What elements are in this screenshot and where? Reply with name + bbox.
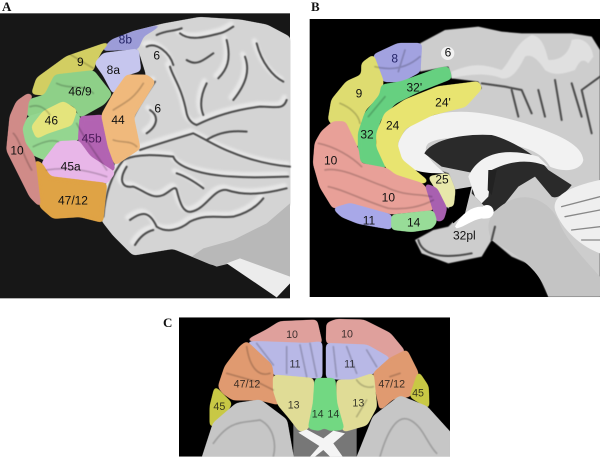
labels C: 10: [286, 329, 298, 341]
sulci: [213, 343, 437, 457]
white optic chiasm: [298, 429, 345, 457]
labels B: 24': [435, 96, 451, 110]
area 8b: [102, 24, 163, 51]
labels A: 6: [154, 101, 161, 115]
labels A: 8a: [107, 63, 120, 77]
area 8a: [95, 49, 141, 94]
labels A: 45a: [61, 159, 81, 173]
labels A: 6: [153, 48, 160, 62]
labels A: 46: [45, 113, 58, 127]
labels C: 13: [352, 398, 364, 410]
labels A: 9: [77, 55, 84, 69]
labels C: 45: [412, 388, 424, 400]
labels C: 47/12: [234, 378, 260, 390]
medial purple area: [425, 183, 447, 222]
labels C: 13: [288, 399, 300, 411]
labels C: 11: [289, 358, 301, 370]
labels B: 14: [407, 215, 421, 229]
area 45b: [78, 115, 115, 173]
labels C: 47/12: [378, 378, 405, 390]
labels B: 6: [445, 46, 452, 60]
area 25: [428, 173, 455, 207]
area 13 left: [273, 375, 315, 432]
labels C: 14: [327, 408, 339, 420]
area 47/12 left: [218, 342, 280, 405]
area 32 and 32': [358, 67, 452, 168]
labels A: 10: [10, 143, 24, 157]
labels B: 8: [391, 52, 398, 66]
labels B: 32pl: [453, 228, 476, 242]
right grey lobe: [356, 396, 450, 457]
brain B: grey cortex and brainstem: [397, 27, 600, 297]
labels B: 25: [435, 172, 449, 186]
area 9: [32, 42, 110, 95]
labels C: 10: [341, 328, 353, 340]
labels A: 8b: [119, 32, 132, 46]
labels C: 11: [344, 358, 355, 370]
labels B: 24: [386, 119, 400, 133]
labels B: 10: [382, 191, 395, 205]
labels C: 14: [312, 408, 324, 420]
area 11: [333, 203, 392, 229]
area 47/12 right: [373, 350, 418, 410]
area 10 right: [326, 319, 405, 359]
area 8: [373, 43, 422, 82]
labels A: 44: [111, 113, 125, 127]
labels B: 32: [360, 128, 374, 142]
labels C: 45: [213, 401, 225, 413]
panel A: lateral brain view: [0, 13, 290, 298]
area 10 left: [249, 320, 322, 343]
area 9: [328, 55, 383, 150]
labels B: [324, 46, 476, 242]
labels A: 45b: [82, 131, 102, 145]
ventricle: [424, 135, 572, 213]
labels B: 32': [407, 80, 422, 94]
area 11 right: [326, 343, 390, 380]
central grey tissue: [293, 423, 357, 457]
area 24 and 24': [377, 82, 482, 183]
area 13 right: [337, 373, 377, 432]
area 45 right: [410, 372, 429, 408]
area 44: [102, 75, 155, 165]
area 45a: [42, 141, 115, 183]
panel C: orbital brain view: [179, 317, 460, 457]
brain A: grey cortex: [101, 17, 290, 297]
area 46: [22, 102, 80, 161]
labels A: 46/9: [68, 84, 92, 98]
sulci on coloured areas: [13, 53, 143, 177]
panel B: medial brain section: [310, 19, 600, 297]
area 10: [7, 93, 41, 207]
labels C: [213, 328, 424, 420]
labels B: 11: [363, 214, 376, 228]
area 45 left: [210, 387, 232, 427]
left grey lobe: [199, 400, 295, 457]
sulci on coloured areas: [318, 50, 433, 209]
labels B: 9: [356, 87, 363, 101]
labels A: [10, 32, 161, 207]
area 14: [392, 211, 437, 232]
area 46/9: [27, 71, 112, 117]
area 11 left: [247, 342, 322, 378]
labels A: 47/12: [58, 193, 88, 207]
brainstem: [488, 197, 600, 297]
area 10: [313, 122, 433, 214]
panel label C: C: [163, 315, 172, 330]
labels B: 10: [324, 154, 338, 168]
area 47/12: [35, 160, 107, 222]
corpus callosum: [398, 112, 583, 173]
area 14: [308, 378, 344, 431]
